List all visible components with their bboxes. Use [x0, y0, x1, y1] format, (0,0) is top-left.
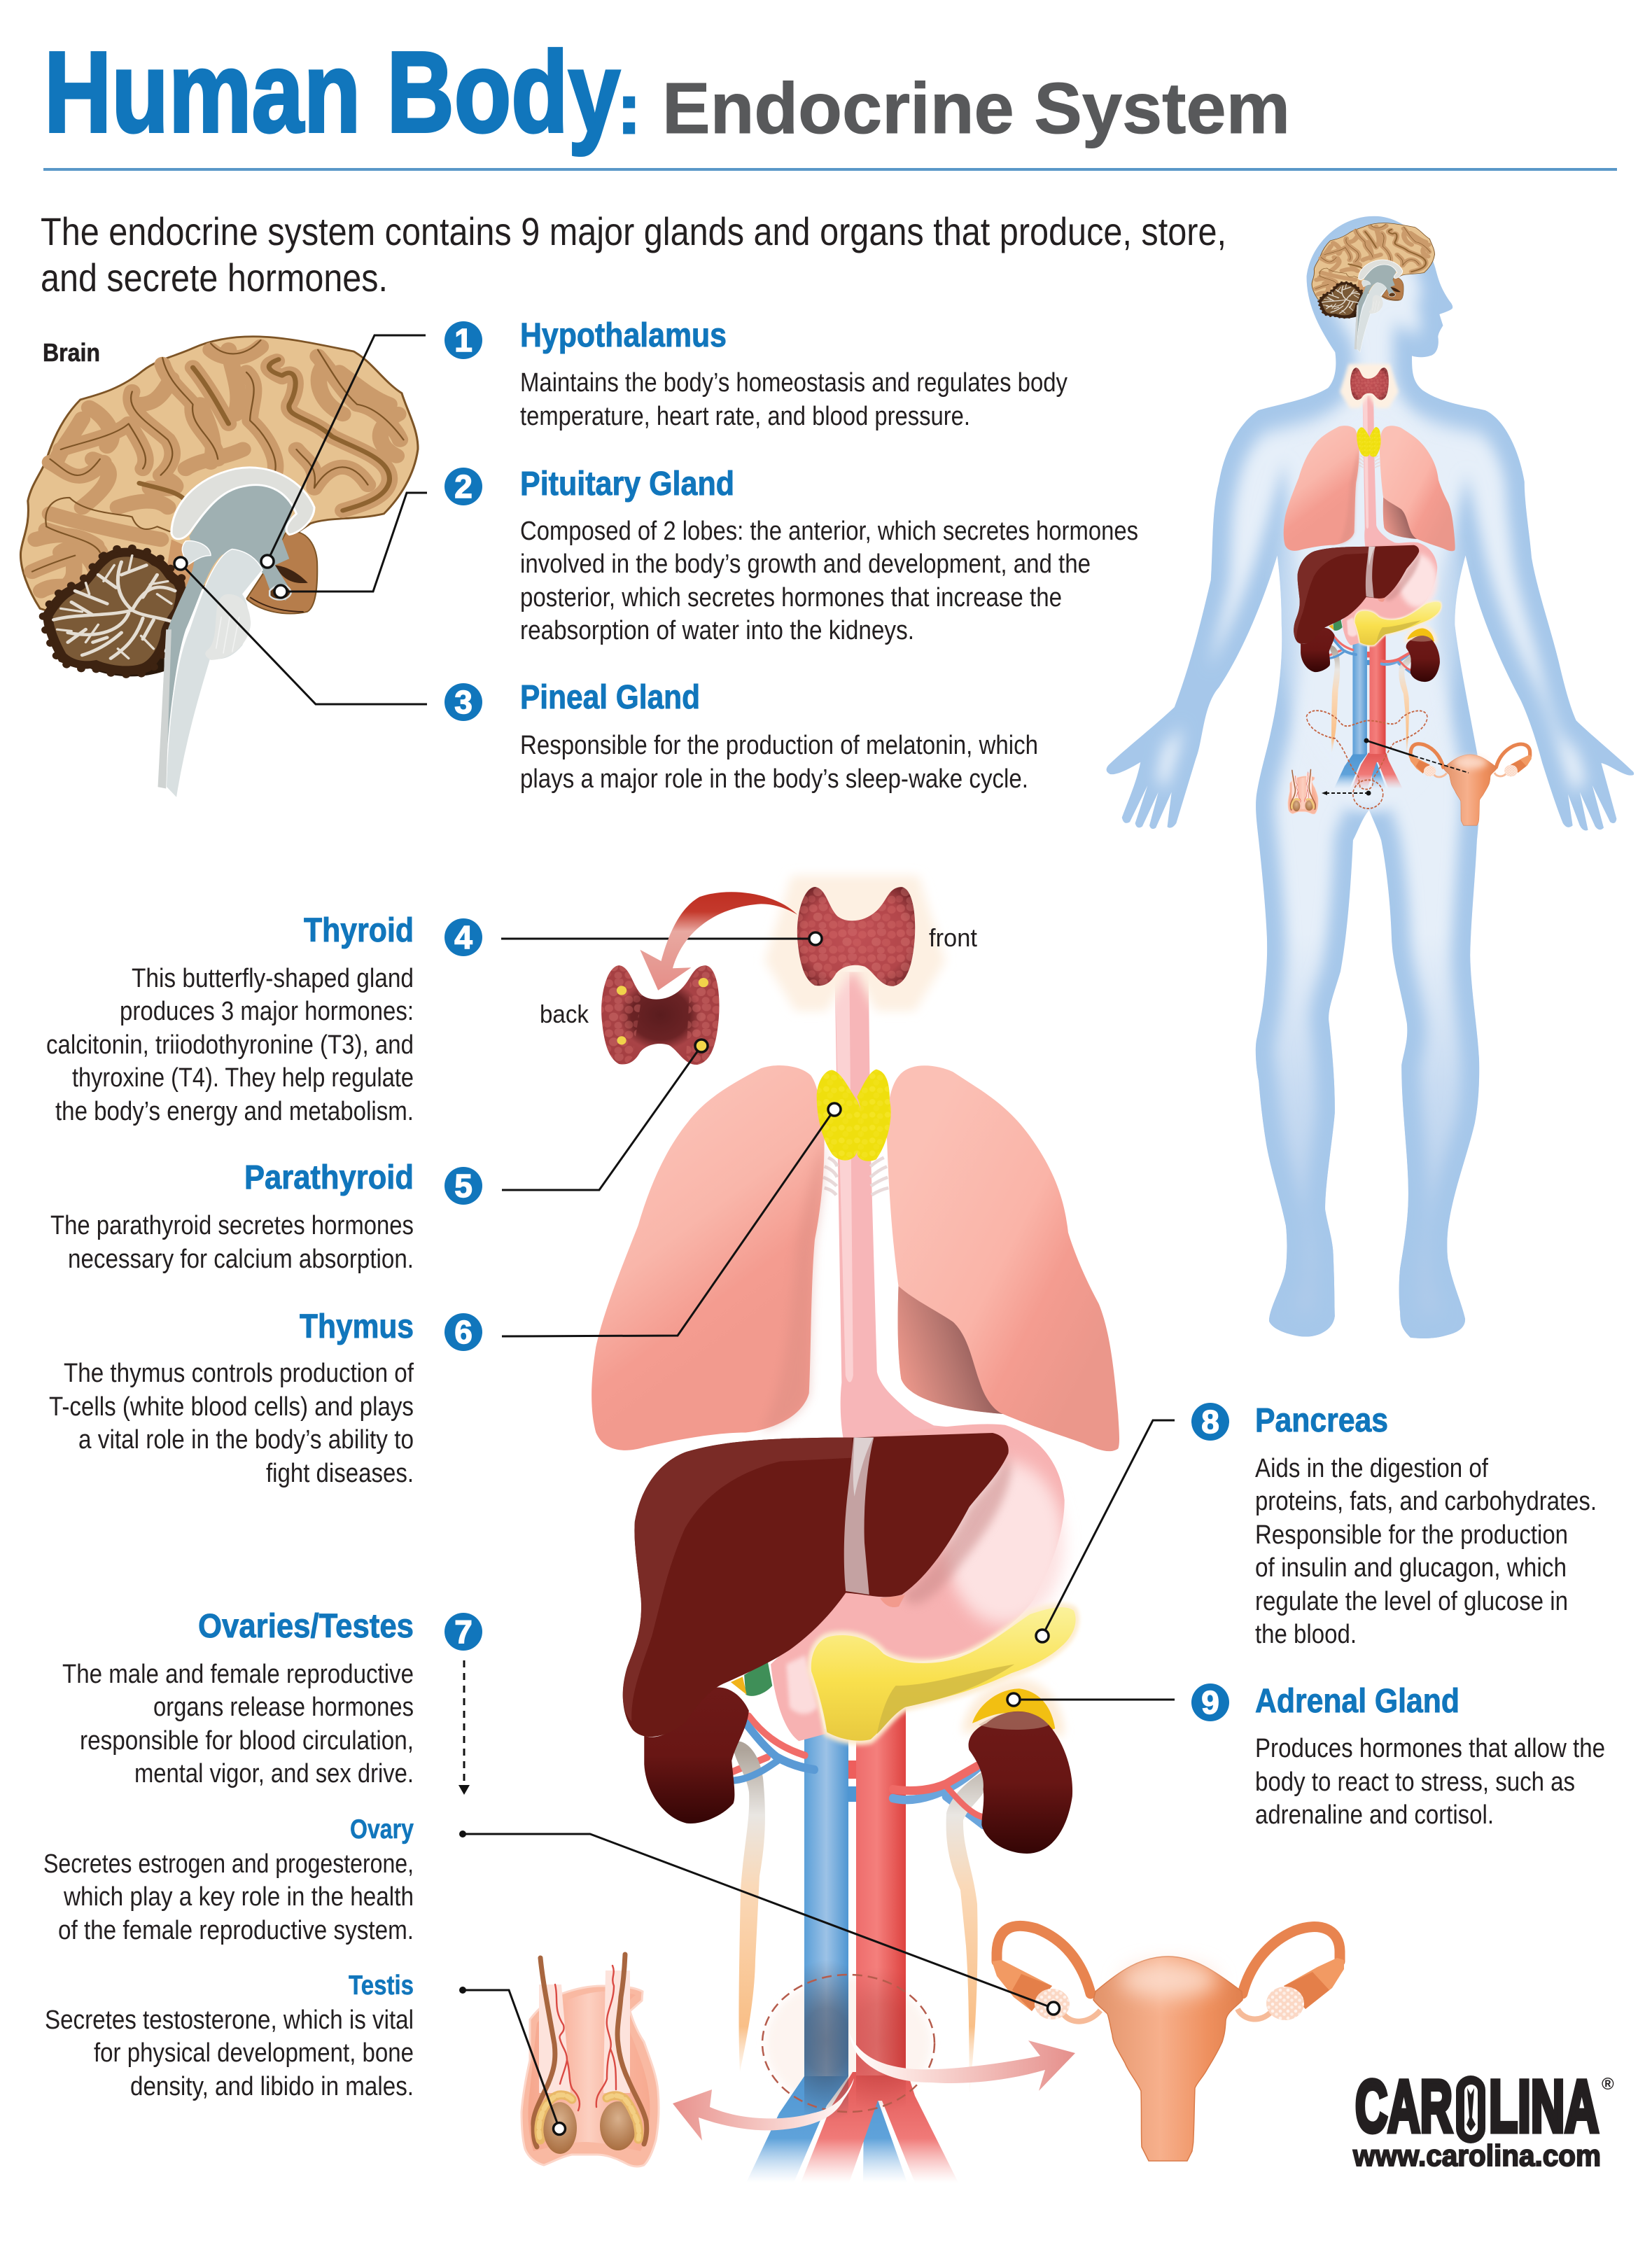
panel: pancreas [1255, 1402, 1597, 1649]
logo: Carolina [1352, 2066, 1614, 2173]
panel: hypothalamus [520, 317, 1068, 431]
ovary left [992, 1960, 1052, 2011]
testis left [543, 2102, 577, 2154]
badge 6: 6 [454, 1314, 472, 1350]
uterus and ovaries [992, 1926, 1344, 2161]
panel: hypothalamus: Hypothalamus [520, 317, 727, 354]
badge 9: 9 [1201, 1684, 1219, 1721]
badge 2 [444, 468, 482, 505]
logo: Carolina: www.carolina.com [1352, 2139, 1601, 2173]
badge 6 [444, 1313, 482, 1351]
scrotum [522, 1986, 659, 2166]
panel: thymus: T-cells (white blood cells) and plays [49, 1392, 414, 1422]
liver [623, 1433, 1009, 1737]
leader: pancreas [1036, 1420, 1175, 1642]
badge 4 [444, 918, 482, 956]
dashed arrow from 7 [458, 1660, 470, 1795]
title [44, 28, 1290, 156]
testis right [600, 2101, 636, 2150]
badge 5 [444, 1167, 482, 1205]
cardiac notch [898, 1286, 1003, 1414]
panel: parathyroid: The parathyroid secretes hormones [50, 1211, 414, 1240]
fallopian tubes [997, 1926, 1340, 1994]
subheading: testis: Testis [349, 1970, 414, 2001]
panel: thyroid: This butterfly-shaped gland [132, 964, 414, 993]
lung right [887, 1065, 1119, 1451]
bronchi [823, 1158, 888, 1195]
title: Endocrine System [662, 68, 1290, 148]
ovary right [1284, 1958, 1344, 2009]
badge 1 [444, 321, 482, 359]
panel: adrenal gland: body to react to stress, such as [1255, 1768, 1575, 1797]
brain label: Brain [43, 338, 100, 367]
leader: parathyroid [502, 1040, 708, 1190]
badge 5: 5 [454, 1168, 472, 1204]
badge 7 [444, 1613, 482, 1651]
leader: thyroid [501, 932, 822, 945]
panel: thyroid [46, 912, 414, 1126]
panel: ovaries and testes: mental vigor, and sex drive. [134, 1759, 414, 1788]
panel: ovaries and testes [43, 1608, 414, 2101]
body silhouette [1107, 216, 1634, 1338]
label: back: back [540, 1000, 589, 1028]
panel: thyroid: Thyroid [304, 912, 414, 949]
panel: parathyroid: necessary for calcium absorption. [68, 1245, 414, 1274]
pelvis glow [766, 1977, 931, 2109]
gallbladder [744, 1660, 772, 1696]
logo: Carolina: CAR [1355, 2066, 1452, 2148]
panel: thymus: The thymus controls production of [64, 1359, 414, 1388]
brain illustration [20, 337, 418, 798]
thyroid arrow [640, 892, 797, 990]
gyri shading [32, 346, 400, 591]
intro text [41, 209, 1226, 300]
panel: pineal gland: Pineal Gland [520, 679, 700, 716]
panel: ovaries and testes: organs release hormones [153, 1693, 414, 1722]
epididymis right [607, 2096, 639, 2139]
panel: pituitary gland: Composed of 2 lobes: the anterior, which secretes hormones [520, 517, 1138, 546]
epididymis left [539, 2095, 572, 2140]
ventricle [162, 485, 295, 787]
pituitary stalk [270, 585, 291, 600]
small brain [1312, 223, 1434, 352]
stomach [771, 1424, 1065, 1741]
panel: ovaries and testes: The male and female reproductive [62, 1660, 414, 1689]
arrow to testes [673, 2078, 854, 2141]
panel: adrenal gland: Adrenal Gland [1255, 1683, 1460, 1720]
panel: ovaries and testes: of the female reproductive system. [58, 1916, 414, 1945]
kidney left [644, 1688, 749, 1823]
panel: pituitary gland: Pituitary Gland [520, 465, 734, 503]
arrow to uterus [849, 2032, 1075, 2091]
panel: pancreas: of insulin and glucagon, which [1255, 1553, 1567, 1583]
sulci lines [32, 340, 404, 572]
label: front: front [929, 923, 977, 952]
panel: thyroid: produces 3 major hormones: [120, 997, 414, 1026]
panel: hypothalamus: temperature, heart rate, and blood pressure. [520, 402, 970, 431]
cerebellum base shadow [46, 629, 164, 676]
ureter right [946, 1771, 986, 2093]
intro text: and secrete hormones. [41, 255, 388, 300]
adrenal glow [961, 1679, 1065, 1736]
esophagus and trachea [592, 972, 1119, 1461]
corpus callosum [172, 468, 314, 539]
leader: pineal [174, 557, 427, 704]
panel: parathyroid [50, 1159, 414, 1274]
panel: ovaries and testes: responsible for blood circulation, [80, 1726, 414, 1756]
small leader arrows [1322, 738, 1469, 795]
panel: adrenal gland: adrenaline and cortisol. [1255, 1800, 1494, 1830]
panel: parathyroid: Parathyroid [244, 1159, 414, 1196]
thyroid back [601, 965, 719, 1065]
panel: ovaries and testes: which play a key role in the health [63, 1882, 414, 1912]
panel: hypothalamus: Maintains the body’s homeostasis and regulates body [520, 368, 1068, 398]
panel: pancreas: the blood. [1255, 1620, 1357, 1649]
ureter left [732, 1741, 765, 2072]
pancreas [811, 1607, 1076, 1741]
leader: hypothalamus [261, 335, 426, 568]
renal vessels [733, 1716, 983, 1825]
panel: pituitary gland: reabsorption of water into the kidneys. [520, 616, 914, 645]
pelvis magnifier [762, 1960, 940, 2121]
badge 3: 3 [454, 684, 472, 720]
panel: pancreas: regulate the level of glucose in [1255, 1587, 1568, 1616]
small dashed reproductive outline [1307, 710, 1427, 808]
panel: thymus: fight diseases. [266, 1459, 414, 1488]
logo: Carolina: ® [1602, 2075, 1614, 2094]
panel: pituitary gland [520, 465, 1138, 645]
badge 8 [1191, 1403, 1229, 1441]
panel: adrenal gland [1255, 1683, 1605, 1830]
uterus body [1093, 1956, 1242, 2161]
panel: pineal gland: Responsible for the production of melatonin, which [520, 731, 1038, 760]
panel: pancreas: Aids in the digestion of [1255, 1454, 1488, 1483]
lung left [592, 1065, 825, 1450]
leader: ovary [459, 1830, 1060, 2015]
subheading: ovary: Ovary [350, 1814, 414, 1844]
whole body figure with organs [1107, 216, 1634, 1338]
panel: thyroid: the body’s energy and metabolism. [55, 1097, 414, 1126]
pons [205, 594, 251, 660]
badge 2: 2 [454, 468, 472, 505]
leader: thymus [502, 1103, 841, 1336]
panel: pancreas: Pancreas [1255, 1402, 1388, 1439]
thyroid front [797, 887, 915, 986]
cords [533, 1954, 647, 2147]
leader: adrenal [1007, 1693, 1175, 1706]
badge 7: 7 [454, 1614, 472, 1650]
leader: testis [459, 1987, 566, 2135]
midbrain tan area [164, 540, 200, 617]
panel: thymus: a vital role in the body’s ability to [78, 1425, 414, 1455]
cerebrum [20, 337, 418, 629]
leader: pituitary [274, 493, 427, 598]
panel: pituitary gland: posterior, which secretes hormones that increase the [520, 583, 1062, 612]
spermatic strips [539, 1984, 570, 2093]
torso organs [592, 876, 1119, 2183]
small testes [1288, 769, 1318, 814]
adrenal gland [972, 1688, 1055, 1730]
title: : [617, 70, 640, 148]
brainstem [166, 549, 262, 798]
thymus [817, 1070, 891, 1161]
panel: pancreas: Responsible for the production [1255, 1520, 1568, 1550]
panel: thymus: Thymus [300, 1308, 414, 1345]
badge 3 [444, 683, 482, 721]
badge 4: 4 [454, 919, 472, 955]
thyroid halo [765, 876, 945, 1161]
uterus highlight [1120, 1961, 1218, 1998]
panel: pituitary gland: involved in the body’s growth and development, and the [520, 550, 1091, 579]
panel: thymus [49, 1308, 414, 1488]
panel: thyroid: thyroxine (T4). They help regulate [72, 1063, 414, 1093]
frontal lower lobe [246, 531, 317, 614]
panel: ovaries and testes: Ovaries/Testes [198, 1608, 414, 1645]
kidneys and adrenal [644, 1660, 1072, 1854]
panel: pineal gland: plays a major role in the body’s sleep-wake cycle. [520, 764, 1028, 794]
vessels [746, 1694, 958, 2183]
badge 9 [1191, 1684, 1229, 1721]
panel: ovaries and testes: Secretes testosterone, which is vital [45, 2005, 414, 2035]
panel: ovaries and testes: for physical development, bone [94, 2038, 414, 2068]
panel: pineal gland [520, 679, 1038, 794]
renal vessels front [735, 1723, 983, 1817]
kidney right [969, 1712, 1072, 1854]
badge 8: 8 [1201, 1404, 1219, 1440]
panel: thyroid: calcitonin, triiodothyronine (T3), and [46, 1030, 414, 1060]
small organs [1284, 364, 1455, 789]
small uterus [1409, 744, 1532, 825]
panel: ovaries and testes: density, and libido in males. [130, 2072, 414, 2101]
panel: ovaries and testes: Secretes estrogen and progesterone, [43, 1849, 414, 1879]
testes [522, 1954, 659, 2166]
cerebellum [43, 548, 186, 675]
badge 1: 1 [454, 322, 472, 358]
logo: Carolina: O [1459, 2066, 1483, 2148]
intro text: The endocrine system contains 9 major glands and organs that produce, store, [41, 209, 1226, 253]
title: Human Body [44, 28, 620, 156]
